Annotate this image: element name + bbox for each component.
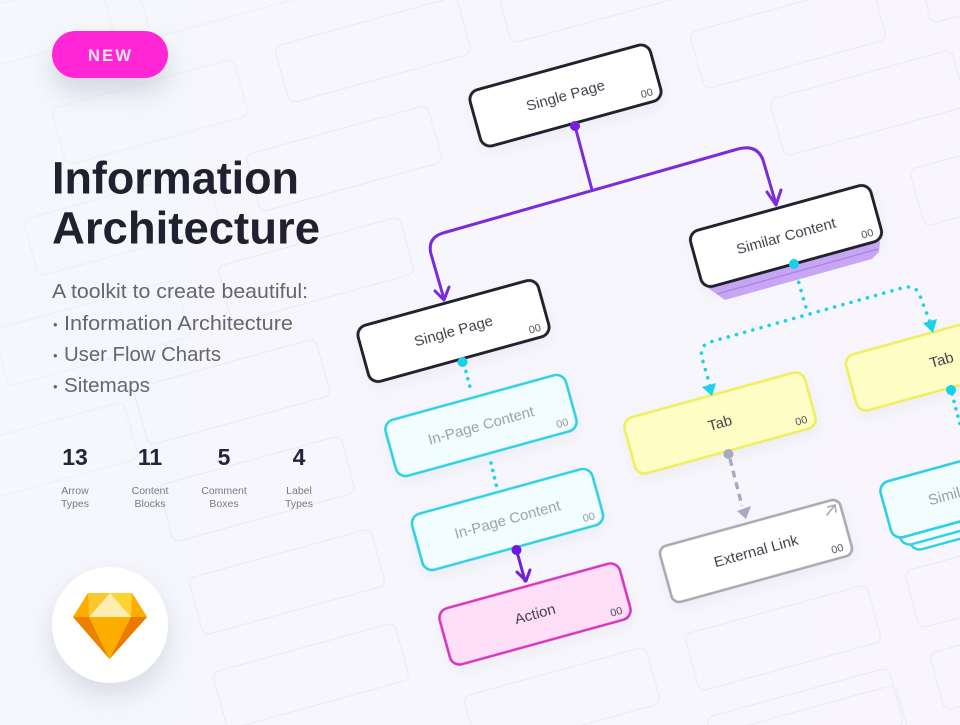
stat: label types (285, 444, 313, 510)
stat: label types: Types (285, 498, 313, 510)
stat: comment boxes: 5 (218, 444, 231, 470)
connector: cyan dotted split from similar content (701, 266, 930, 386)
node: tab left (622, 370, 818, 476)
intro text and bullet list: • (53, 379, 58, 394)
arrow head: cyan left (702, 383, 716, 396)
node: action: 00 (609, 605, 624, 620)
node: single page left: 00 (527, 322, 542, 337)
title: Information (52, 152, 299, 204)
stat: comment boxes: Boxes (209, 498, 239, 510)
node: tab right: Tab (928, 349, 956, 372)
node: tab left: 00 (794, 414, 809, 429)
intro text and bullet list: • (53, 317, 58, 332)
node: in-page content 1: In-Page Content (426, 403, 537, 449)
intro text and bullet list (52, 281, 308, 397)
stats row (61, 444, 313, 510)
icon: external link arrow (827, 505, 836, 515)
node: tab left: Tab (706, 412, 734, 435)
node: action (437, 561, 633, 667)
node: single page top: 00 (639, 86, 654, 101)
node: similar stack right (878, 434, 960, 552)
intro text and bullet list: • (53, 348, 58, 363)
stat: label types: 4 (293, 444, 306, 470)
connector: tab to external link (724, 449, 751, 519)
connector: in-page to in-page (491, 463, 497, 488)
node: similar content (688, 183, 884, 289)
node: external link (658, 498, 854, 604)
connector: purple split from top page (430, 126, 781, 300)
stat: content blocks: Content (132, 485, 168, 497)
connector: in-page to action (512, 545, 530, 581)
intro text and bullet list: A toolkit to create beautiful: (52, 281, 308, 303)
node: tab right (844, 307, 960, 413)
connector: similar content start dot (789, 259, 799, 269)
node: in-page content 2: In-Page Content (453, 497, 563, 543)
node: in-page content 1 (383, 373, 579, 478)
stat: content blocks: Blocks (135, 498, 165, 510)
node: single page left (356, 278, 551, 384)
intro text and bullet list: User Flow Charts (64, 344, 221, 366)
stat: content blocks: 11 (138, 444, 162, 470)
stat: arrow types (61, 444, 89, 510)
node: similar content: 00 (860, 227, 875, 242)
connector: tab right to stack (946, 385, 960, 424)
intro text and bullet list: Sitemaps (64, 375, 150, 397)
badge: NEW (52, 31, 168, 78)
node: similar content: Similar Content (734, 214, 839, 258)
node: single page left: Single Page (412, 313, 495, 350)
stack layers: similar content (708, 241, 880, 300)
node: external link: External Link (712, 532, 801, 571)
icon: Sketch diamond badge (52, 567, 168, 683)
node: single page top (468, 43, 663, 148)
stat: arrow types: Types (61, 498, 89, 510)
stat: label types: Label (286, 485, 312, 497)
stat: arrow types: 13 (62, 444, 88, 470)
stat: comment boxes (201, 444, 247, 510)
title (52, 152, 320, 254)
node: single page top: Single Page (524, 77, 607, 115)
intro text and bullet list: Information Architecture (64, 313, 293, 335)
stat: comment boxes: Comment (201, 485, 247, 497)
node: in-page content 2: 00 (581, 510, 596, 525)
faint background blocks, left side (0, 0, 334, 509)
node: in-page content 2 (410, 467, 605, 572)
stat: arrow types: Arrow (61, 485, 89, 497)
stat: content blocks (132, 444, 168, 510)
title: Architecture (52, 202, 320, 254)
node: external link: 00 (830, 542, 845, 557)
arrow head: cyan right (923, 319, 937, 333)
node: action: Action (513, 601, 557, 628)
node: in-page content 1: 00 (555, 416, 570, 431)
badge: NEW: NEW (88, 47, 131, 65)
connector: single page top start dot (570, 121, 580, 131)
connector: single page to in-page (458, 357, 471, 391)
